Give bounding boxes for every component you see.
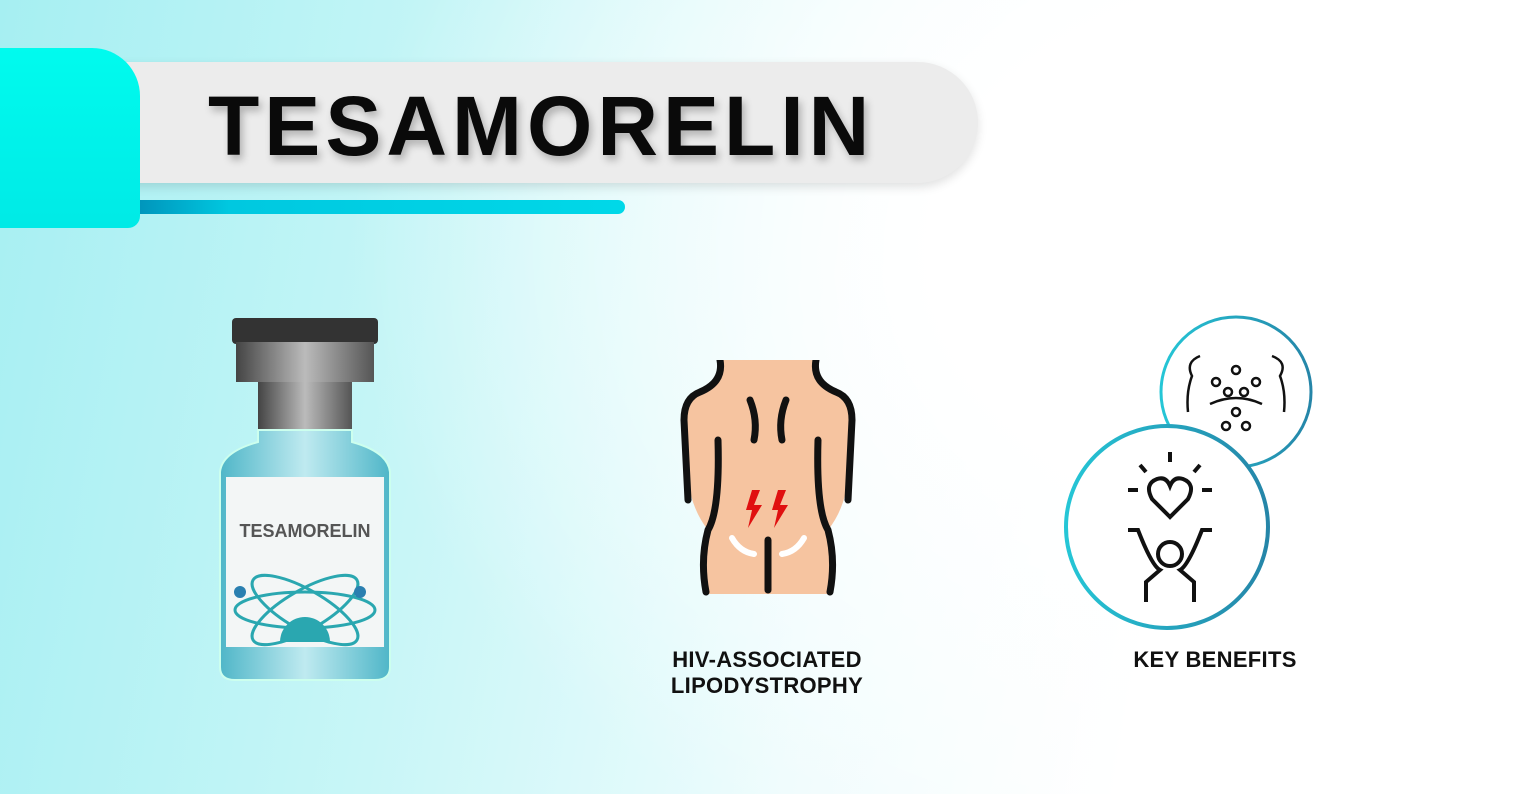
vial (219, 318, 391, 681)
accent line (130, 200, 625, 214)
icon: benefits circles (1064, 316, 1312, 630)
title bar (100, 62, 978, 183)
label: lipodystrophy (671, 647, 863, 698)
label: lipodystrophy: LIPODYSTROPHY (671, 673, 863, 698)
teal block (0, 48, 140, 228)
vial: TESAMORELIN (239, 521, 371, 541)
title: TESAMORELIN (208, 79, 874, 173)
label: key benefits: KEY BENEFITS (1133, 647, 1297, 672)
label: lipodystrophy: HIV-ASSOCIATED (672, 647, 862, 672)
icon: torso (680, 360, 856, 596)
